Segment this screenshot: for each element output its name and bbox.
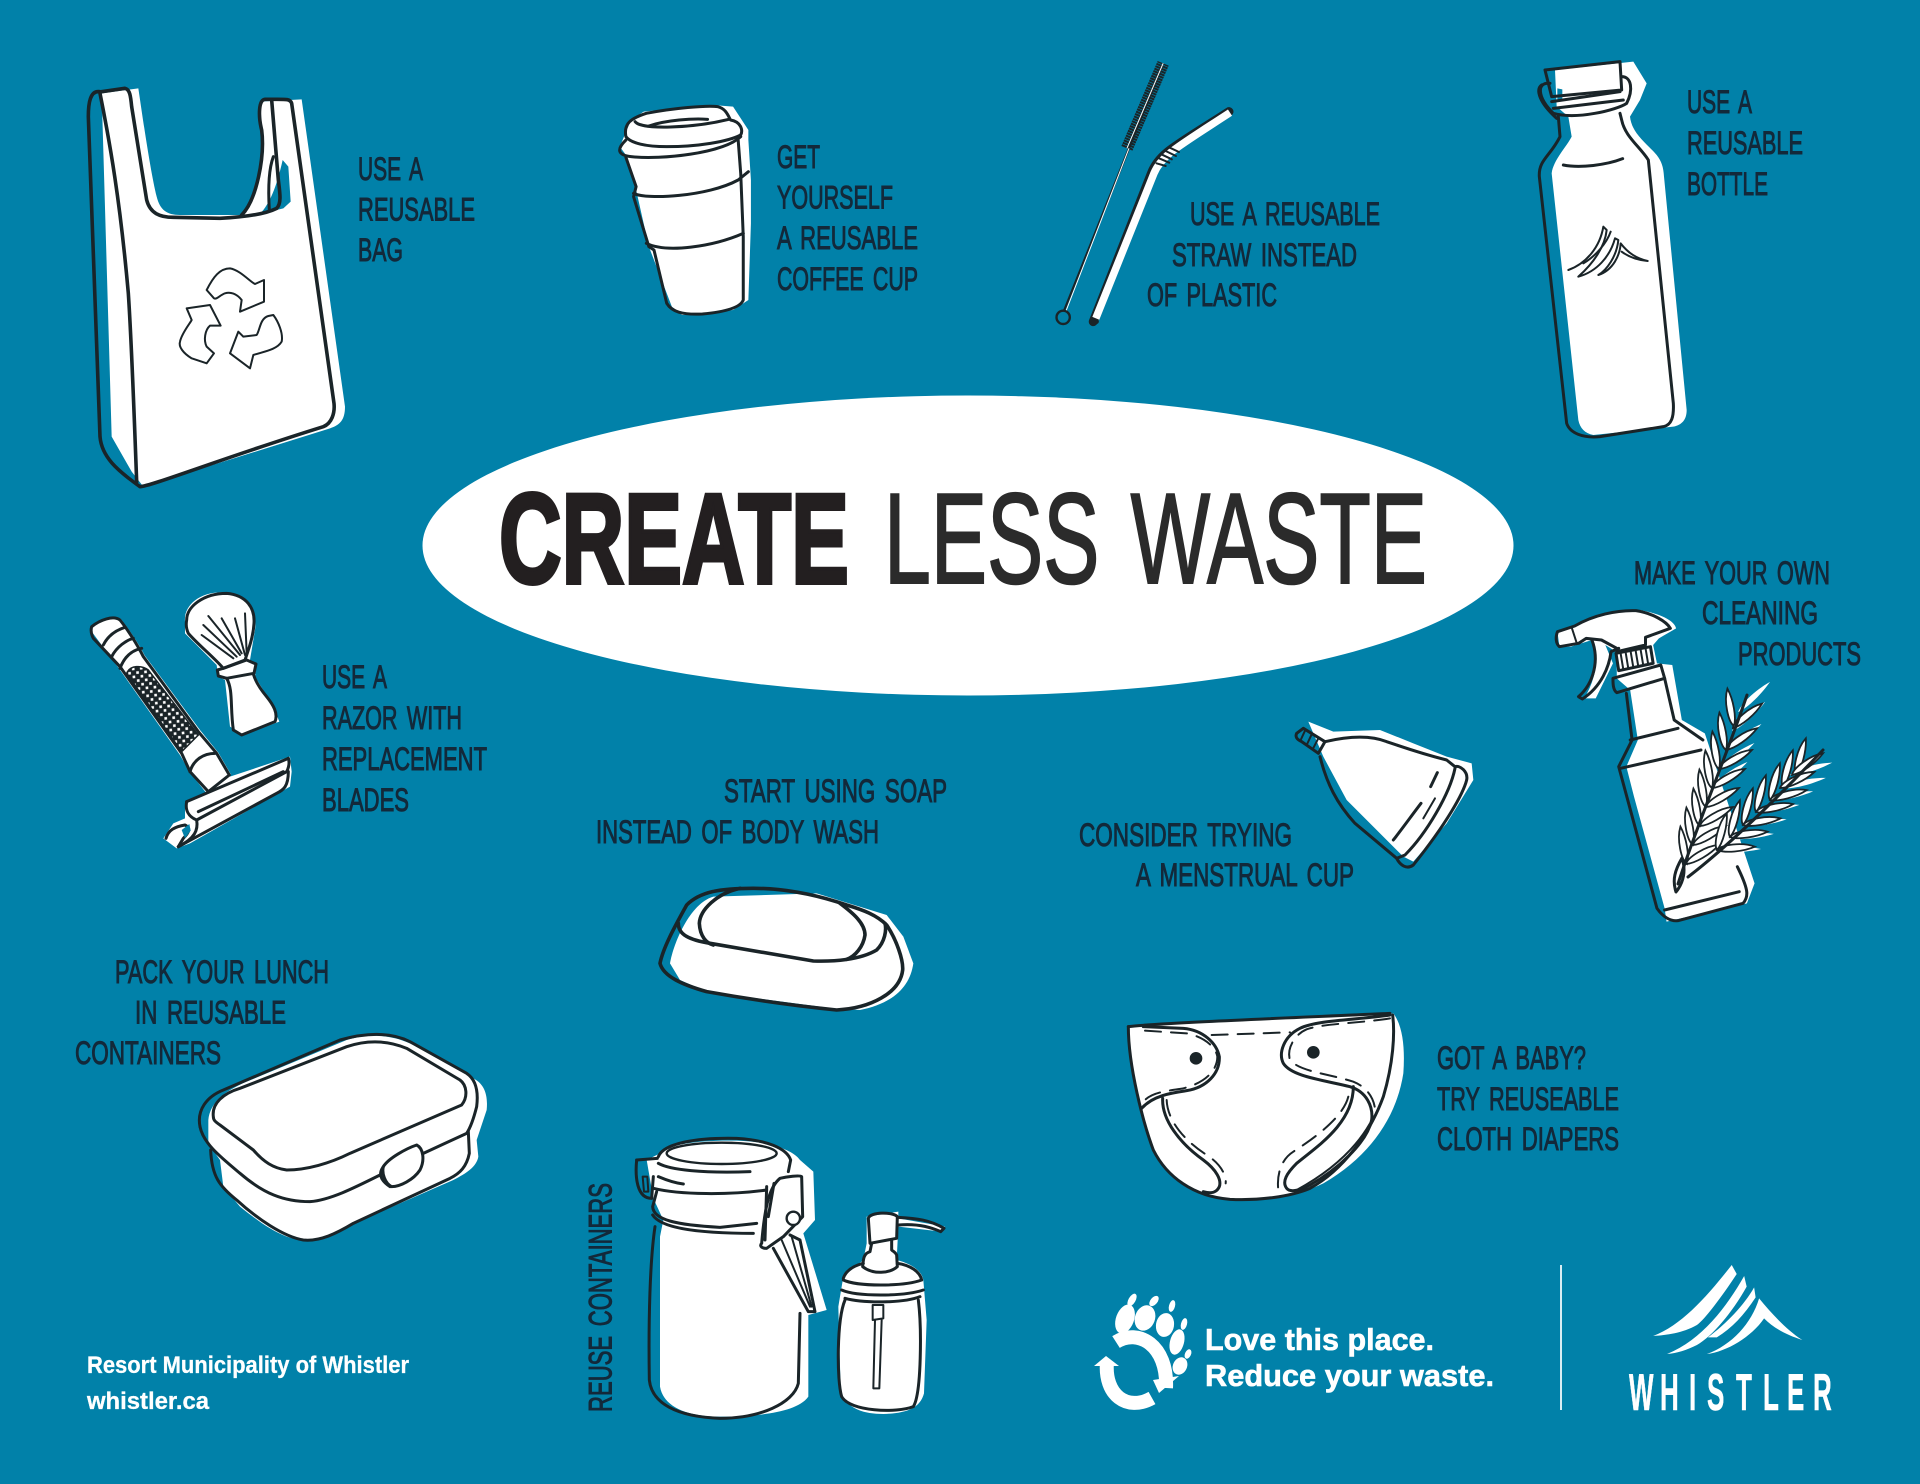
white ellipse	[422, 396, 1514, 696]
label: menstrual cup: CONSIDER TRYING	[1079, 817, 1292, 853]
footer: municipality credit: Resort Municipality of Whistler	[87, 1352, 409, 1379]
label: soap: START USING SOAP	[724, 773, 947, 809]
logo: bear paw with recycling arrows	[1094, 1292, 1193, 1403]
item: menstrual cup	[1079, 722, 1473, 893]
label: bottle: USE A	[1687, 84, 1752, 120]
footer: municipality credit	[86, 1352, 409, 1415]
item: cloth diapers	[1128, 1013, 1619, 1200]
wordmark: WHISTLER: R	[1813, 1363, 1832, 1421]
icon: soap pump jar	[838, 1212, 945, 1414]
item: lunch container	[75, 954, 487, 1240]
label: lunch: IN REUSABLE	[135, 994, 286, 1030]
title banner	[422, 396, 1514, 696]
label: coffee cup	[777, 139, 918, 297]
label: lunch: CONTAINERS	[75, 1035, 221, 1071]
divider	[1560, 1265, 1562, 1410]
wordmark: WHISTLER: L	[1763, 1363, 1779, 1421]
label: diapers: GOT A BABY?	[1437, 1040, 1586, 1076]
label: diapers: TRY REUSEABLE	[1437, 1081, 1619, 1117]
label: soap: INSTEAD OF BODY WASH	[596, 814, 879, 850]
wordmark: WHISTLER: S	[1707, 1363, 1724, 1421]
icon: cleaning brush	[1057, 63, 1163, 324]
label: cleaning products: MAKE YOUR OWN	[1634, 555, 1830, 591]
icon: rosemary sprigs	[1674, 680, 1833, 892]
item: reusable bag	[88, 88, 475, 487]
footer: municipality credit: whistler.ca	[86, 1388, 210, 1415]
item: cleaning products	[1556, 555, 1861, 922]
wordmark: WHISTLER: W	[1629, 1363, 1654, 1421]
tagline: Reduce your waste.	[1205, 1358, 1494, 1393]
label: coffee cup: A REUSABLE	[777, 220, 918, 256]
label: cleaning products: CLEANING	[1702, 595, 1818, 631]
label: reuse containers: REUSE CONTAINERS	[582, 1183, 618, 1412]
tagline	[1205, 1322, 1494, 1393]
item: reuse containers	[582, 1138, 945, 1418]
label: coffee cup: COFFEE CUP	[777, 261, 918, 297]
icon: cloth diaper	[1128, 1013, 1404, 1200]
label: razor: RAZOR WITH	[322, 700, 462, 736]
icon: coffee cup	[620, 105, 751, 315]
wordmark: WHISTLER: E	[1787, 1363, 1804, 1421]
label: diapers	[1437, 1040, 1619, 1157]
label: lunch: PACK YOUR LUNCH	[115, 954, 329, 990]
label: razor: REPLACEMENT	[322, 741, 487, 777]
label: reusable bag: USE A	[358, 151, 423, 187]
icon: lunch box	[199, 1035, 487, 1240]
label: bottle: BOTTLE	[1687, 166, 1768, 202]
label: razor: BLADES	[322, 782, 409, 818]
label: straw	[1147, 196, 1380, 313]
title text bold: CREATE	[499, 468, 849, 611]
label: coffee cup: YOURSELF	[777, 180, 893, 216]
label: straw: OF PLASTIC	[1147, 277, 1277, 313]
label: reusable bag	[358, 151, 475, 268]
icon: bottle	[1539, 62, 1687, 437]
label: bottle	[1687, 84, 1803, 202]
tagline: Love this place.	[1205, 1322, 1434, 1357]
icon: clip-top jar	[636, 1138, 827, 1418]
item: reusable bottle	[1539, 62, 1803, 437]
label: razor	[322, 659, 487, 818]
label: menstrual cup: A MENSTRUAL CUP	[1136, 857, 1354, 893]
icon: metal straw	[1090, 112, 1230, 325]
wordmark: WHISTLER: I	[1689, 1363, 1696, 1421]
label: cleaning products	[1634, 555, 1861, 672]
label: diapers: CLOTH DIAPERS	[1437, 1121, 1619, 1157]
label: straw: USE A REUSABLE	[1190, 196, 1380, 232]
item: reusable straw	[1057, 63, 1380, 325]
item: coffee cup	[620, 105, 918, 315]
label: reusable bag: REUSABLE	[358, 192, 475, 228]
logo: Whistler mountain	[1653, 1265, 1802, 1354]
wordmark: WHISTLER: T	[1736, 1363, 1752, 1421]
icon: bag	[88, 88, 345, 487]
label: cleaning products: PRODUCTS	[1738, 636, 1861, 672]
icon: razor	[90, 617, 292, 848]
label: menstrual cup	[1079, 817, 1354, 893]
item: razor	[90, 592, 487, 848]
label: bottle: REUSABLE	[1687, 125, 1803, 161]
wordmark: WHISTLER: H	[1660, 1363, 1679, 1421]
icon: menstrual cup	[1296, 722, 1473, 867]
label: straw: STRAW INSTEAD	[1172, 237, 1357, 273]
label: reusable bag: BAG	[358, 232, 403, 268]
label: razor: USE A	[322, 659, 387, 695]
wordmark: WHISTLER	[1629, 1363, 1832, 1421]
label: lunch	[75, 954, 329, 1071]
icon: shaving brush	[185, 592, 279, 735]
title text light: LESS WASTE	[884, 467, 1427, 611]
label: soap	[596, 773, 947, 850]
item: soap	[596, 773, 947, 1010]
label: coffee cup: GET	[777, 139, 820, 175]
icon: soap dish	[660, 888, 913, 1010]
icon: spray bottle	[1556, 610, 1755, 922]
